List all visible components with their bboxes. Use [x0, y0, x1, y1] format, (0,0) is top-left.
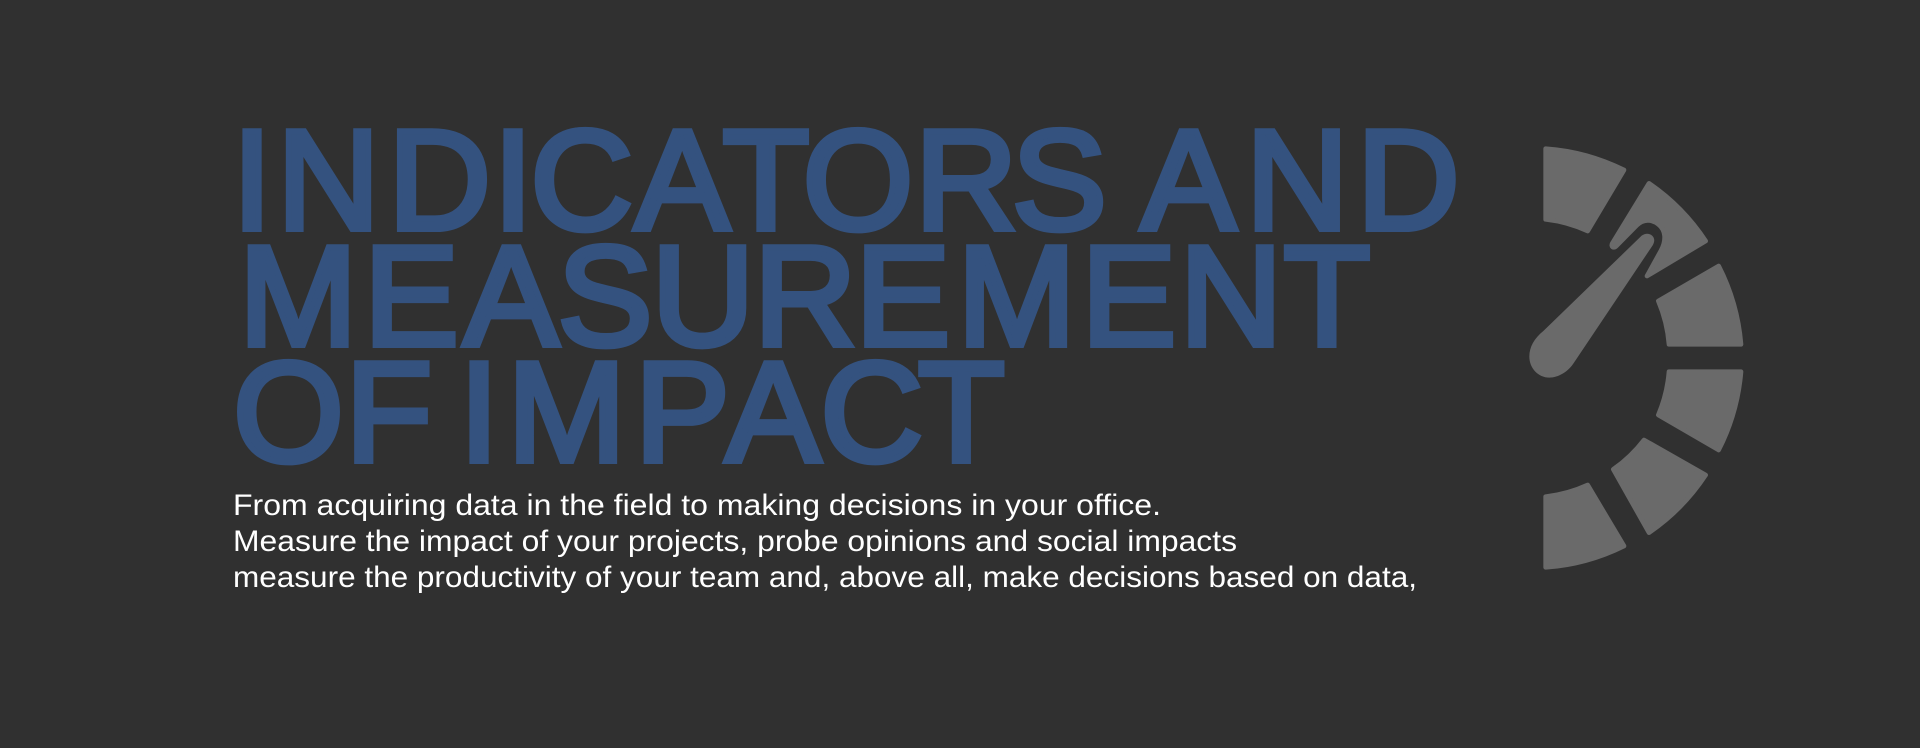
gauge segment 1	[1546, 149, 1624, 231]
gauge segment 6	[1546, 485, 1624, 567]
gauge segment 4	[1658, 372, 1741, 450]
gauge segment 5	[1613, 440, 1706, 533]
description line 3: measure the productivity of your team and, above all, make decisions based on data,	[233, 561, 1417, 594]
icon: speedometer gauge	[1529, 149, 1741, 567]
description line 1: From acquiring data in the field to making decisions in your office.	[233, 489, 1161, 522]
title line 2: MEASUREMENT	[239, 217, 1370, 376]
description line 2: Measure the impact of your projects, probe opinions and social impacts	[233, 525, 1237, 558]
gauge needle	[1529, 234, 1654, 378]
title line 3: OF IMPACT	[233, 333, 1005, 492]
title	[232, 101, 1460, 492]
title line 1: INDICATORS AND	[232, 101, 1460, 260]
gauge segment 3	[1658, 266, 1741, 344]
description text	[233, 489, 1417, 594]
gauge segment 2 with needle notch	[1612, 183, 1706, 276]
